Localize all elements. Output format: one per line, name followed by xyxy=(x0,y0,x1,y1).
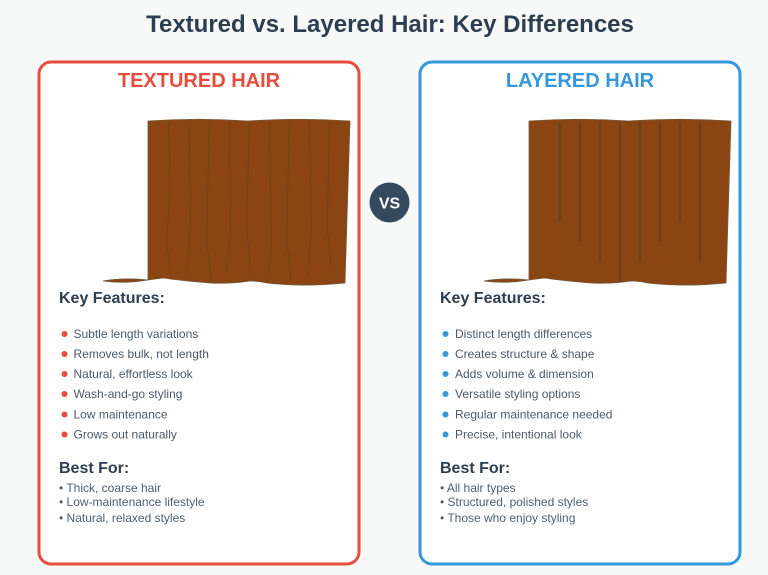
best for list: layered xyxy=(440,481,588,525)
feature list: textured: Wash-and-go styling xyxy=(74,387,182,401)
heading: best for: Best For: xyxy=(59,460,129,477)
illustration: layered hair xyxy=(484,119,731,285)
best for list: textured: • Low-maintenance lifestyle xyxy=(59,495,205,509)
best for list: layered: • Those who enjoy styling xyxy=(440,511,575,525)
heading: best for: Best For: xyxy=(440,460,510,477)
feature list: textured: Grows out naturally xyxy=(74,428,177,442)
feature list: layered: Creates structure & shape xyxy=(455,347,595,361)
illustration: textured hair xyxy=(103,119,350,285)
best for list: textured: • Thick, coarse hair xyxy=(59,481,161,495)
panel: textured hair xyxy=(39,62,359,564)
best for list: layered: • All hair types xyxy=(440,481,516,495)
feature list: textured: Subtle length variations xyxy=(74,327,198,341)
panel: layered hair xyxy=(420,62,740,564)
best for list: textured: • Natural, relaxed styles xyxy=(59,511,185,525)
heading: textured hair: TEXTURED HAIR xyxy=(118,70,281,92)
feature list: textured: Low maintenance xyxy=(74,408,168,422)
title: Textured vs. Layered Hair: Key Differences xyxy=(146,11,634,38)
vs badge xyxy=(370,182,410,222)
feature list: textured: Removes bulk, not length xyxy=(74,347,209,361)
feature list: layered: Regular maintenance needed xyxy=(455,408,612,422)
feature list: layered: Precise, intentional look xyxy=(455,428,583,442)
feature list: layered: Adds volume & dimension xyxy=(455,367,594,381)
feature list: layered: Distinct length differences xyxy=(455,327,592,341)
feature list: textured xyxy=(62,327,209,442)
heading: layered hair: LAYERED HAIR xyxy=(506,70,655,92)
best for list: textured xyxy=(59,481,205,525)
feature list: textured: Natural, effortless look xyxy=(74,367,194,381)
feature list: layered: Versatile styling options xyxy=(455,387,580,401)
best for list: layered: • Structured, polished styles xyxy=(440,495,588,509)
heading: key features: Key Features: xyxy=(440,290,546,307)
heading: key features: Key Features: xyxy=(59,290,165,307)
feature list: layered xyxy=(442,327,612,442)
vs badge: VS xyxy=(379,196,400,212)
